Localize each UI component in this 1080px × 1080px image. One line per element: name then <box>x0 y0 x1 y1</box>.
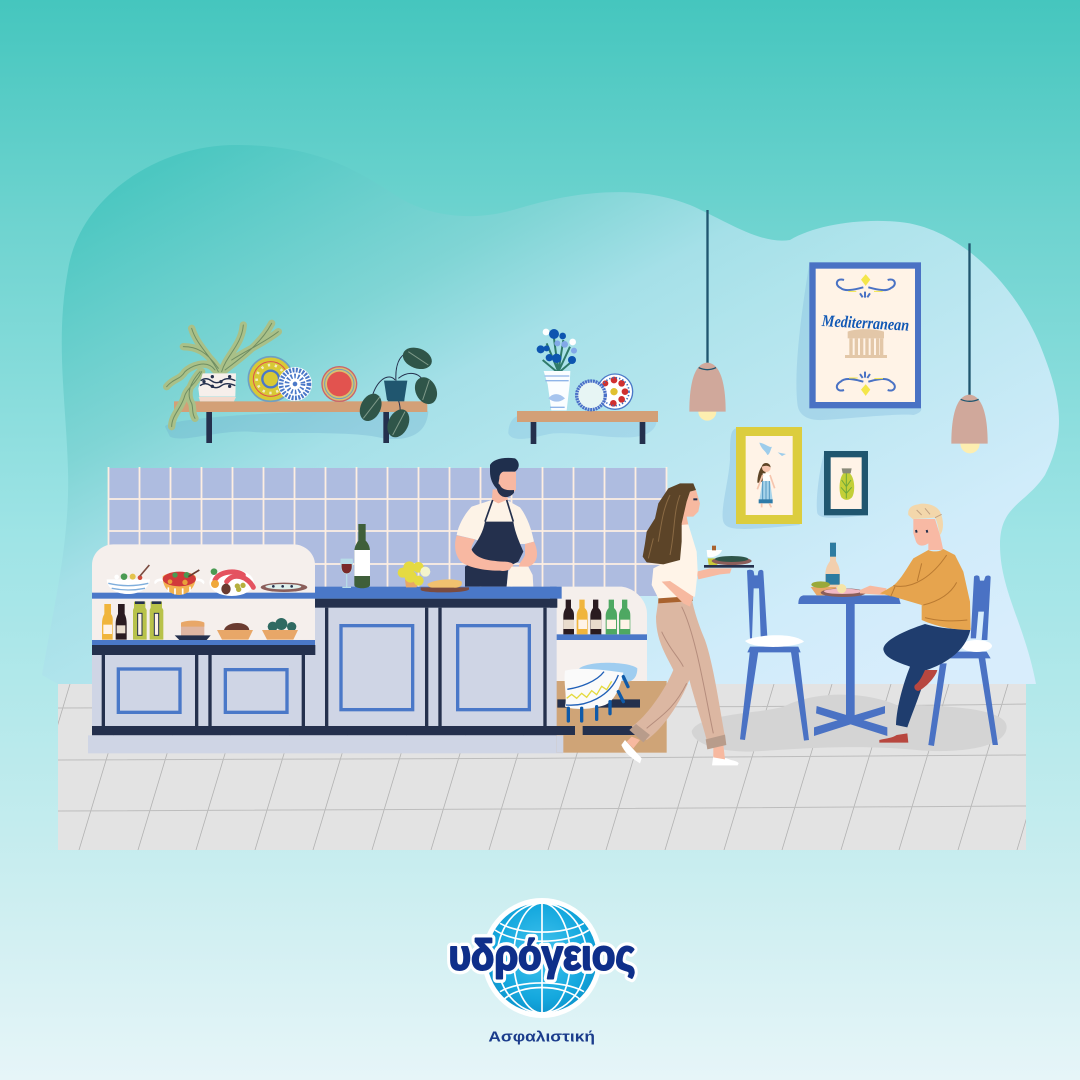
man trousers <box>883 624 971 727</box>
yellow framed picture <box>736 427 802 524</box>
blue flowers <box>537 329 577 372</box>
shelf brackets right <box>531 422 645 444</box>
shelf shadow left <box>165 410 428 439</box>
poster shadow <box>796 263 921 420</box>
chef <box>455 458 537 587</box>
table <box>798 595 901 736</box>
dark bottle b <box>590 600 601 634</box>
pendant lamp left <box>689 210 726 421</box>
right display case <box>550 587 647 681</box>
chef and left counter <box>88 458 563 753</box>
plate with food <box>821 588 866 597</box>
shelf board right <box>517 411 658 422</box>
towel held <box>507 567 533 587</box>
man far shoe <box>879 733 908 743</box>
poster yellow accents <box>848 275 883 395</box>
dark bottle a <box>563 600 574 634</box>
water bottle <box>825 543 840 587</box>
wall blob shape <box>42 145 1059 684</box>
logo wordmark: υδρόγειος <box>449 931 635 979</box>
blue pattern plate <box>278 367 312 401</box>
yellow flowers pot <box>398 561 430 587</box>
woman top <box>652 524 698 598</box>
white and blue vase <box>544 371 570 410</box>
green bottle b <box>619 600 630 634</box>
woman hair <box>643 483 696 564</box>
display shelf bottom <box>92 640 315 645</box>
crate under shelf <box>550 681 667 753</box>
poster parthenon <box>845 329 887 358</box>
chef hair <box>490 458 519 489</box>
shelf shadow right <box>508 416 657 439</box>
Mediterranean poster <box>809 262 921 408</box>
counter end <box>550 587 562 599</box>
insurance company logo <box>449 898 635 1045</box>
folded blue cloth <box>579 663 637 682</box>
chef face <box>498 472 516 495</box>
chef shirt <box>457 500 534 544</box>
man neck and face <box>913 519 943 550</box>
man near shoe <box>914 670 937 691</box>
amber bottle a <box>577 600 588 634</box>
wall shelf left with plates and plants <box>165 323 441 443</box>
man hair <box>908 504 943 535</box>
dark olive plate <box>261 583 307 592</box>
seated man <box>860 504 971 743</box>
meat bowl <box>217 623 253 640</box>
shelf brackets left <box>206 412 389 443</box>
dark leaf plant in teal pot <box>356 344 441 441</box>
embroidered white cloth <box>565 669 628 721</box>
cabinet posts <box>102 608 547 727</box>
man hand <box>860 586 887 595</box>
tiled floor <box>20 684 1067 850</box>
woman belt <box>658 596 693 603</box>
display case left <box>92 544 315 655</box>
red tomato bowl <box>156 570 203 595</box>
cicada <box>840 472 854 500</box>
woman hand on hip <box>662 581 693 607</box>
case shelf <box>557 634 647 640</box>
table food and drink <box>811 543 866 597</box>
chef neck <box>492 489 508 505</box>
yellow frame shadow <box>723 428 800 529</box>
salad dish on table <box>811 587 837 595</box>
right chair <box>928 575 998 746</box>
counter top <box>315 587 561 599</box>
left chair <box>740 570 809 741</box>
dining scene <box>550 483 1007 765</box>
logo subtitle: Ασφαλιστική <box>488 1028 595 1045</box>
woman feet <box>627 737 725 759</box>
pendant lamps and wall pictures <box>689 210 988 529</box>
woman <box>621 483 754 765</box>
shrimp plate <box>209 568 254 596</box>
floor shadow <box>692 695 1007 752</box>
display shelf top <box>92 593 315 599</box>
yellow plate <box>248 357 293 401</box>
wall shelf right with vase and plates <box>508 329 658 444</box>
girl in blue dress <box>757 463 775 507</box>
poster title: Mediterranean <box>821 311 910 335</box>
woman arm <box>697 568 732 579</box>
trailing plant in white pot <box>167 323 278 427</box>
shelf board left <box>174 401 427 412</box>
woman front shoe <box>712 756 739 765</box>
greens bowl <box>262 618 298 640</box>
woman neck and face <box>680 490 700 525</box>
wine glass <box>340 559 353 587</box>
cake on plate <box>175 621 211 640</box>
cabinet body <box>92 655 557 735</box>
chef beard <box>497 482 514 497</box>
teal framed picture <box>824 451 868 515</box>
green jar two <box>150 601 163 640</box>
teal frame shadow <box>817 453 867 518</box>
tray with oil and greens <box>704 546 754 568</box>
floral plate <box>597 374 633 409</box>
red plate <box>322 367 357 401</box>
green jar one <box>133 601 147 640</box>
salad bowl <box>107 565 150 594</box>
counter base <box>92 726 557 735</box>
patterned small plate <box>577 381 605 410</box>
globe <box>482 898 602 1018</box>
dark bottle <box>116 604 127 640</box>
logo wordmark: υδρόγειος <box>449 931 635 979</box>
chef apron straps <box>485 500 513 522</box>
man sweater <box>880 549 971 630</box>
trouser cuffs <box>629 724 726 749</box>
woman back shoe <box>621 740 642 763</box>
cabinet panels <box>118 626 529 712</box>
bird small art <box>759 443 786 456</box>
poster ornament top <box>837 279 895 298</box>
woman trousers <box>632 598 725 740</box>
wine bottle <box>354 524 370 588</box>
poster ornament bottom <box>837 372 895 391</box>
green bottle a <box>606 600 617 634</box>
chef apron <box>465 522 523 587</box>
blue wall tiles <box>108 467 667 596</box>
bread on board <box>421 579 469 592</box>
chef right arm <box>519 542 537 568</box>
pendant lamp right <box>951 243 988 453</box>
amber bottle <box>102 604 113 640</box>
chef left arm <box>455 535 513 571</box>
